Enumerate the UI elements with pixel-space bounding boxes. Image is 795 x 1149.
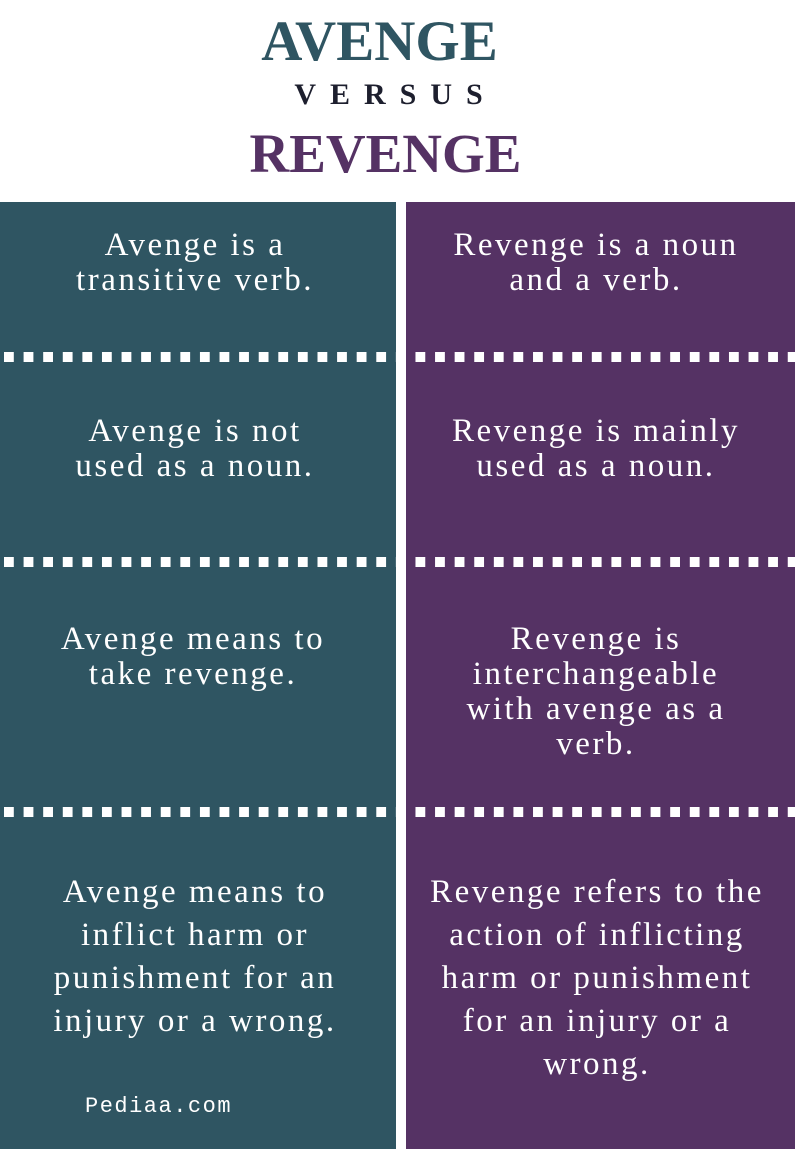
text: revenge row 3: with avenge as a [466, 691, 726, 727]
text: revenge row 4: for an injury or a [463, 1003, 731, 1039]
text: avenge row 1: transitive verb. [76, 262, 314, 298]
text: avenge row 1 [76, 227, 314, 298]
text: avenge row 3 [61, 621, 325, 692]
text: revenge row 4: wrong. [543, 1046, 651, 1082]
text: revenge row 1: and a verb. [509, 262, 683, 298]
text: revenge row 1 [453, 227, 739, 298]
text: revenge row 4: action of inflicting [449, 917, 745, 953]
text: avenge row 4: injury or a wrong. [53, 1003, 337, 1039]
text: revenge row 2 [452, 413, 740, 484]
title: revenge: REVENGE [250, 123, 522, 184]
text: revenge row 1: Revenge is a noun [453, 227, 739, 263]
text: revenge row 3: verb. [556, 726, 636, 762]
panel: revenge column [406, 202, 795, 1149]
text: avenge row 4 [53, 874, 337, 1039]
logo: pediaa.com: Pediaa.com [85, 1094, 232, 1119]
title: avenge: AVENGE [261, 10, 498, 73]
text: revenge row 4: harm or punishment [442, 960, 752, 996]
text: revenge row 2: used as a noun. [476, 448, 716, 484]
text: revenge row 3 [466, 621, 726, 762]
text: avenge row 1: Avenge is a [105, 227, 285, 263]
text: avenge row 3: Avenge means to [61, 621, 325, 657]
text: avenge row 4: punishment for an [54, 960, 336, 996]
text: revenge row 3: interchangeable [473, 656, 719, 692]
text: avenge row 2 [75, 413, 315, 484]
text: avenge row 4: inflict harm or [81, 917, 309, 953]
text: revenge row 2: Revenge is mainly [452, 413, 740, 449]
text: avenge row 4: Avenge means to [63, 874, 327, 910]
text: avenge row 2: Avenge is not [88, 413, 302, 449]
subtitle: versus: VERSUS [294, 78, 497, 111]
text: avenge row 2: used as a noun. [75, 448, 315, 484]
panel: avenge column [0, 202, 396, 1149]
text: revenge row 4 [430, 874, 764, 1082]
text: revenge row 4: Revenge refers to the [430, 874, 764, 910]
text: avenge row 3: take revenge. [89, 656, 297, 692]
text: revenge row 3: Revenge is [511, 621, 681, 657]
